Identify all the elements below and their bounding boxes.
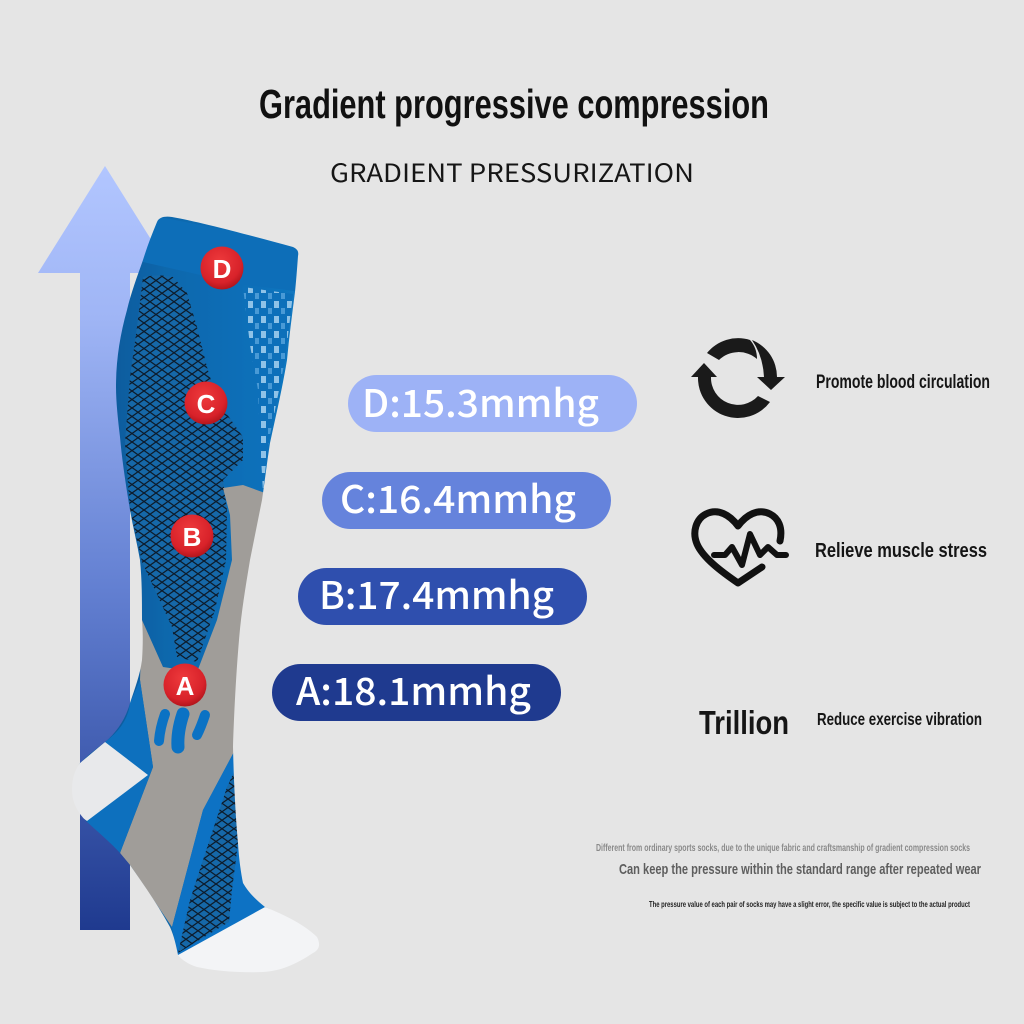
pressure pill D: D:15.3mmhg [362, 373, 599, 428]
marker C [184, 382, 228, 424]
marker A [164, 664, 206, 706]
title: Gradient progressive compression [259, 81, 769, 127]
toe white patch [178, 907, 320, 972]
blue ankle pads [159, 714, 205, 747]
icon: heart with pulse [695, 512, 786, 583]
lower mesh panel [178, 770, 238, 953]
marker D [200, 246, 244, 290]
grey side panel [120, 485, 265, 927]
pressure pill C: C:16.4mmhg [340, 469, 576, 524]
icon: circulation arrows [691, 338, 785, 418]
benefit text: muscle stress: Relieve muscle stress [815, 540, 987, 562]
arrow: upward gradient [38, 166, 172, 930]
heel white patch [66, 742, 148, 821]
subtitle: GRADIENT PRESSURIZATION [330, 154, 694, 190]
pressure pill B: B:17.4mmhg [319, 565, 554, 620]
marker C: C [197, 389, 216, 419]
white dotted knit panel [243, 287, 293, 492]
icon word: Trillion: Trillion [699, 704, 789, 741]
lower front blue panel [172, 750, 270, 960]
compression sock [78, 216, 319, 972]
marker A: A [176, 671, 195, 701]
marker B: B [183, 522, 201, 552]
black mesh calf panel [125, 276, 243, 662]
bright blue heel panel [87, 680, 153, 853]
pressure pill A: A:18.1mmhg [296, 661, 531, 716]
cuff band [143, 215, 302, 292]
marker B [170, 514, 214, 558]
marker D: D [213, 254, 231, 284]
